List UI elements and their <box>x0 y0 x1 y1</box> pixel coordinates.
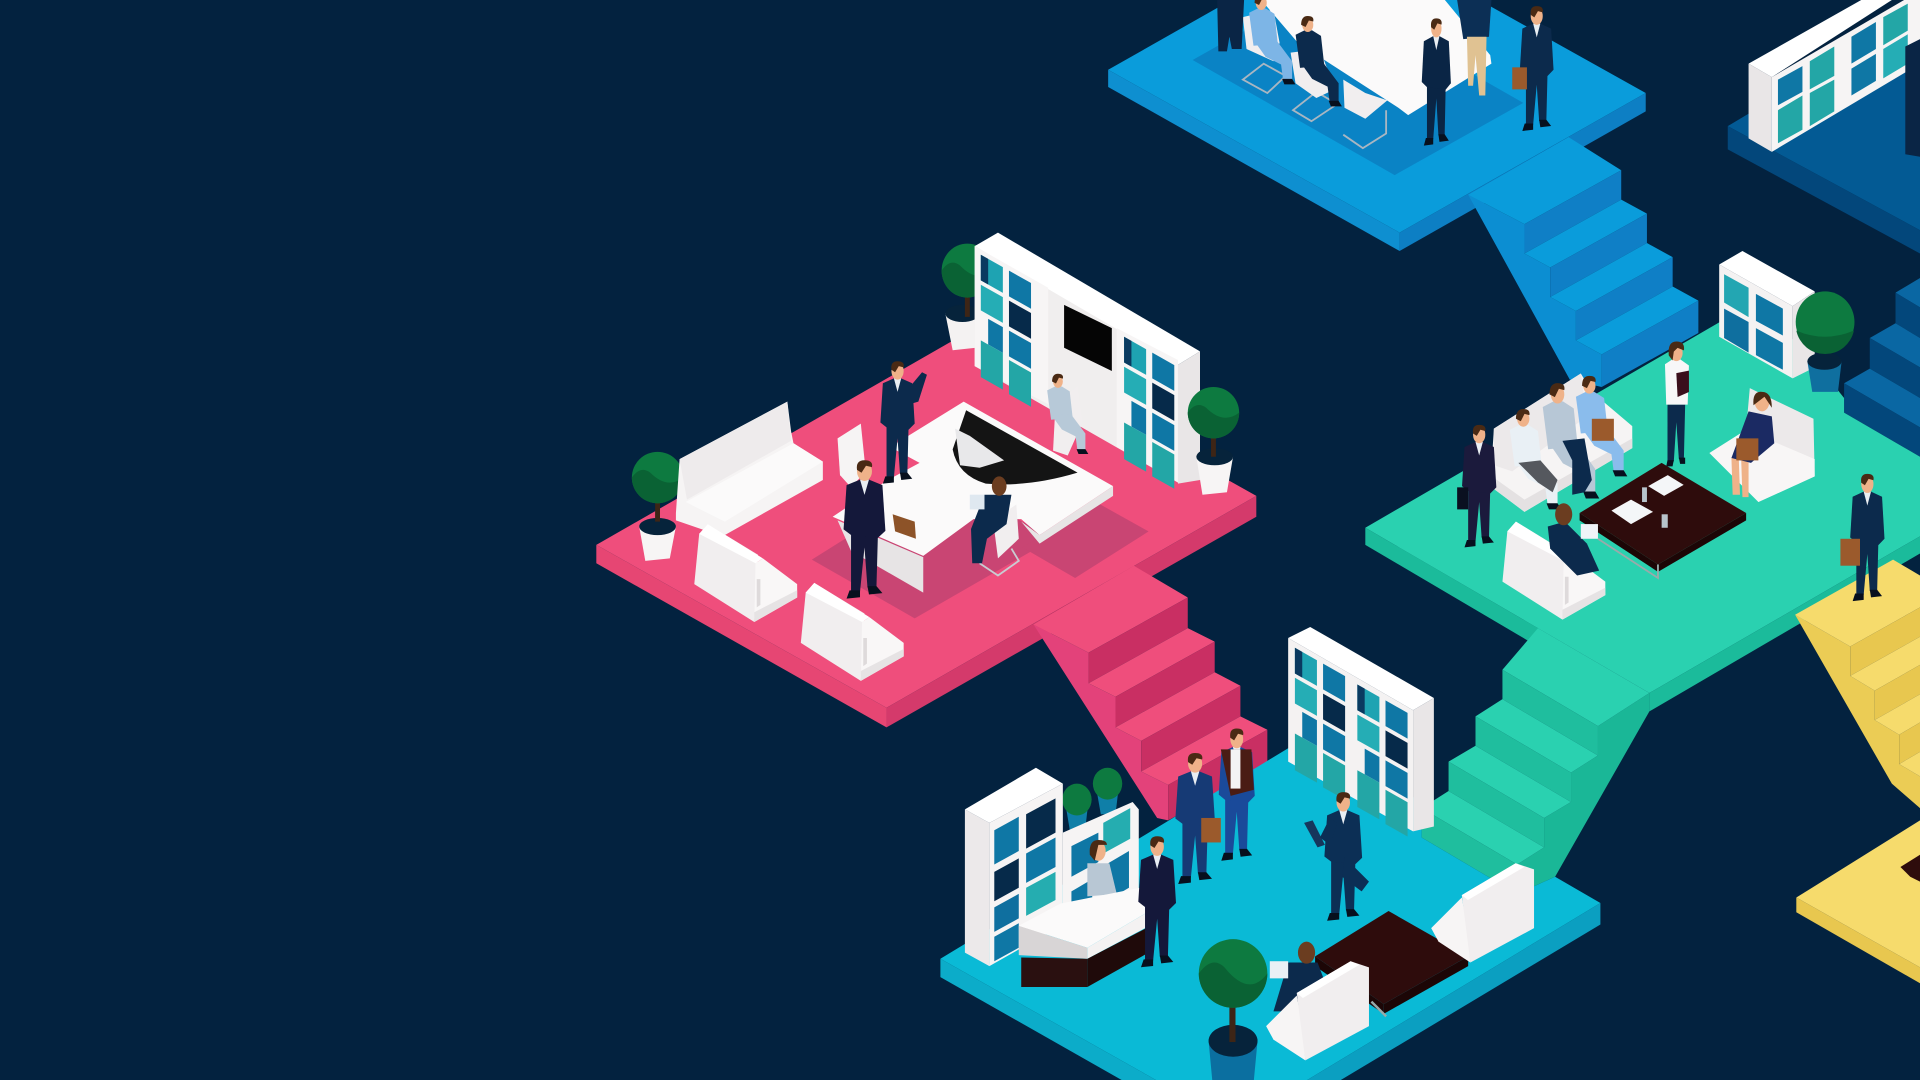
plant: back tree <box>942 244 993 350</box>
stairs <box>1468 137 1698 387</box>
person: man with briefcase <box>1512 6 1554 131</box>
wall unit with TV and bookshelves <box>975 233 1200 489</box>
stairs <box>1422 628 1649 894</box>
sofa <box>676 402 823 536</box>
stairs <box>1795 560 1920 808</box>
person: seated man at table <box>1548 503 1599 576</box>
dark blue stairs <box>1844 278 1920 457</box>
platform <box>1108 0 1646 251</box>
person: standing man talking <box>880 361 927 484</box>
person: seated man behind desk <box>1047 374 1088 456</box>
person: walking man with briefcase <box>1840 474 1884 601</box>
platform <box>596 333 1256 727</box>
panel: cyan reception <box>940 627 1600 1080</box>
shelf cells right <box>1357 684 1408 837</box>
person: standing woman <box>1422 18 1451 146</box>
shelf cells left <box>1295 648 1345 800</box>
shelf cells left <box>981 255 1031 407</box>
platform <box>940 737 1600 1080</box>
bookshelf <box>1719 251 1815 378</box>
person: woman with folder <box>1665 342 1689 466</box>
desk <box>833 402 1113 593</box>
coffee table <box>1580 463 1746 578</box>
bookshelf <box>1749 0 1920 152</box>
person: seated woman <box>1249 0 1295 84</box>
table on yellow platform <box>1900 855 1920 882</box>
yellow platform <box>1796 820 1920 983</box>
bookshelf right <box>1288 627 1434 837</box>
armchair right <box>1709 388 1815 502</box>
person: seated woman in blue <box>1576 376 1627 476</box>
person: seated woman in grey skirt <box>1510 409 1561 509</box>
chair and seated man in front <box>970 476 1019 576</box>
armchair back <box>1431 863 1534 962</box>
armchair front <box>1266 961 1369 1060</box>
shelf cells right <box>1124 337 1174 489</box>
person: seated man <box>1296 16 1342 106</box>
reception back shelf <box>1063 802 1139 931</box>
armchair A <box>694 524 797 622</box>
panel: yellow stairs and lower-right room <box>1795 474 1920 983</box>
panel: dark blue upper-right room <box>1728 0 1920 457</box>
visitor chair <box>838 424 866 487</box>
chair frames <box>1243 64 1386 148</box>
person: walking man with tablet <box>1304 792 1369 921</box>
stairs <box>1033 566 1267 820</box>
sofa <box>1490 373 1632 512</box>
armchair front <box>1502 522 1605 620</box>
plant: left tree <box>632 452 683 561</box>
armchair B <box>801 583 904 681</box>
briefcase <box>893 514 916 539</box>
person: standing man with bag <box>1457 425 1496 547</box>
person: man at right edge <box>1905 39 1920 157</box>
plant: potted tree <box>1796 291 1854 392</box>
panel: blue meeting room <box>1108 0 1698 387</box>
reception front shelf <box>965 768 1063 966</box>
plant: right tree <box>1188 387 1239 495</box>
plants behind reception <box>1062 768 1122 833</box>
person: seated woman on armchair <box>1731 392 1774 497</box>
reception desk <box>1019 887 1149 987</box>
person: seated bearded man <box>1543 383 1599 499</box>
meeting chairs <box>1243 10 1387 119</box>
person: handshake man in blue <box>1175 753 1221 884</box>
person: receptionist <box>1087 840 1117 896</box>
desk blotter <box>953 410 1078 484</box>
panel: pink office <box>596 233 1267 820</box>
meeting table <box>1261 0 1491 115</box>
laptop <box>955 429 1004 468</box>
person: man from behind <box>844 460 885 599</box>
coffee table <box>1315 911 1468 1016</box>
person: standing man at edge of table <box>1217 0 1244 51</box>
TV screen <box>1064 305 1112 371</box>
person: woman across table <box>1457 0 1491 96</box>
panel: teal lounge <box>1365 251 1920 894</box>
platform <box>1365 311 1920 711</box>
person: handshake man with brown jacket <box>1219 728 1255 861</box>
person: seated man on armchair <box>1270 942 1325 1011</box>
plant: large potted tree <box>1199 939 1267 1080</box>
person: man at reception <box>1138 836 1176 967</box>
